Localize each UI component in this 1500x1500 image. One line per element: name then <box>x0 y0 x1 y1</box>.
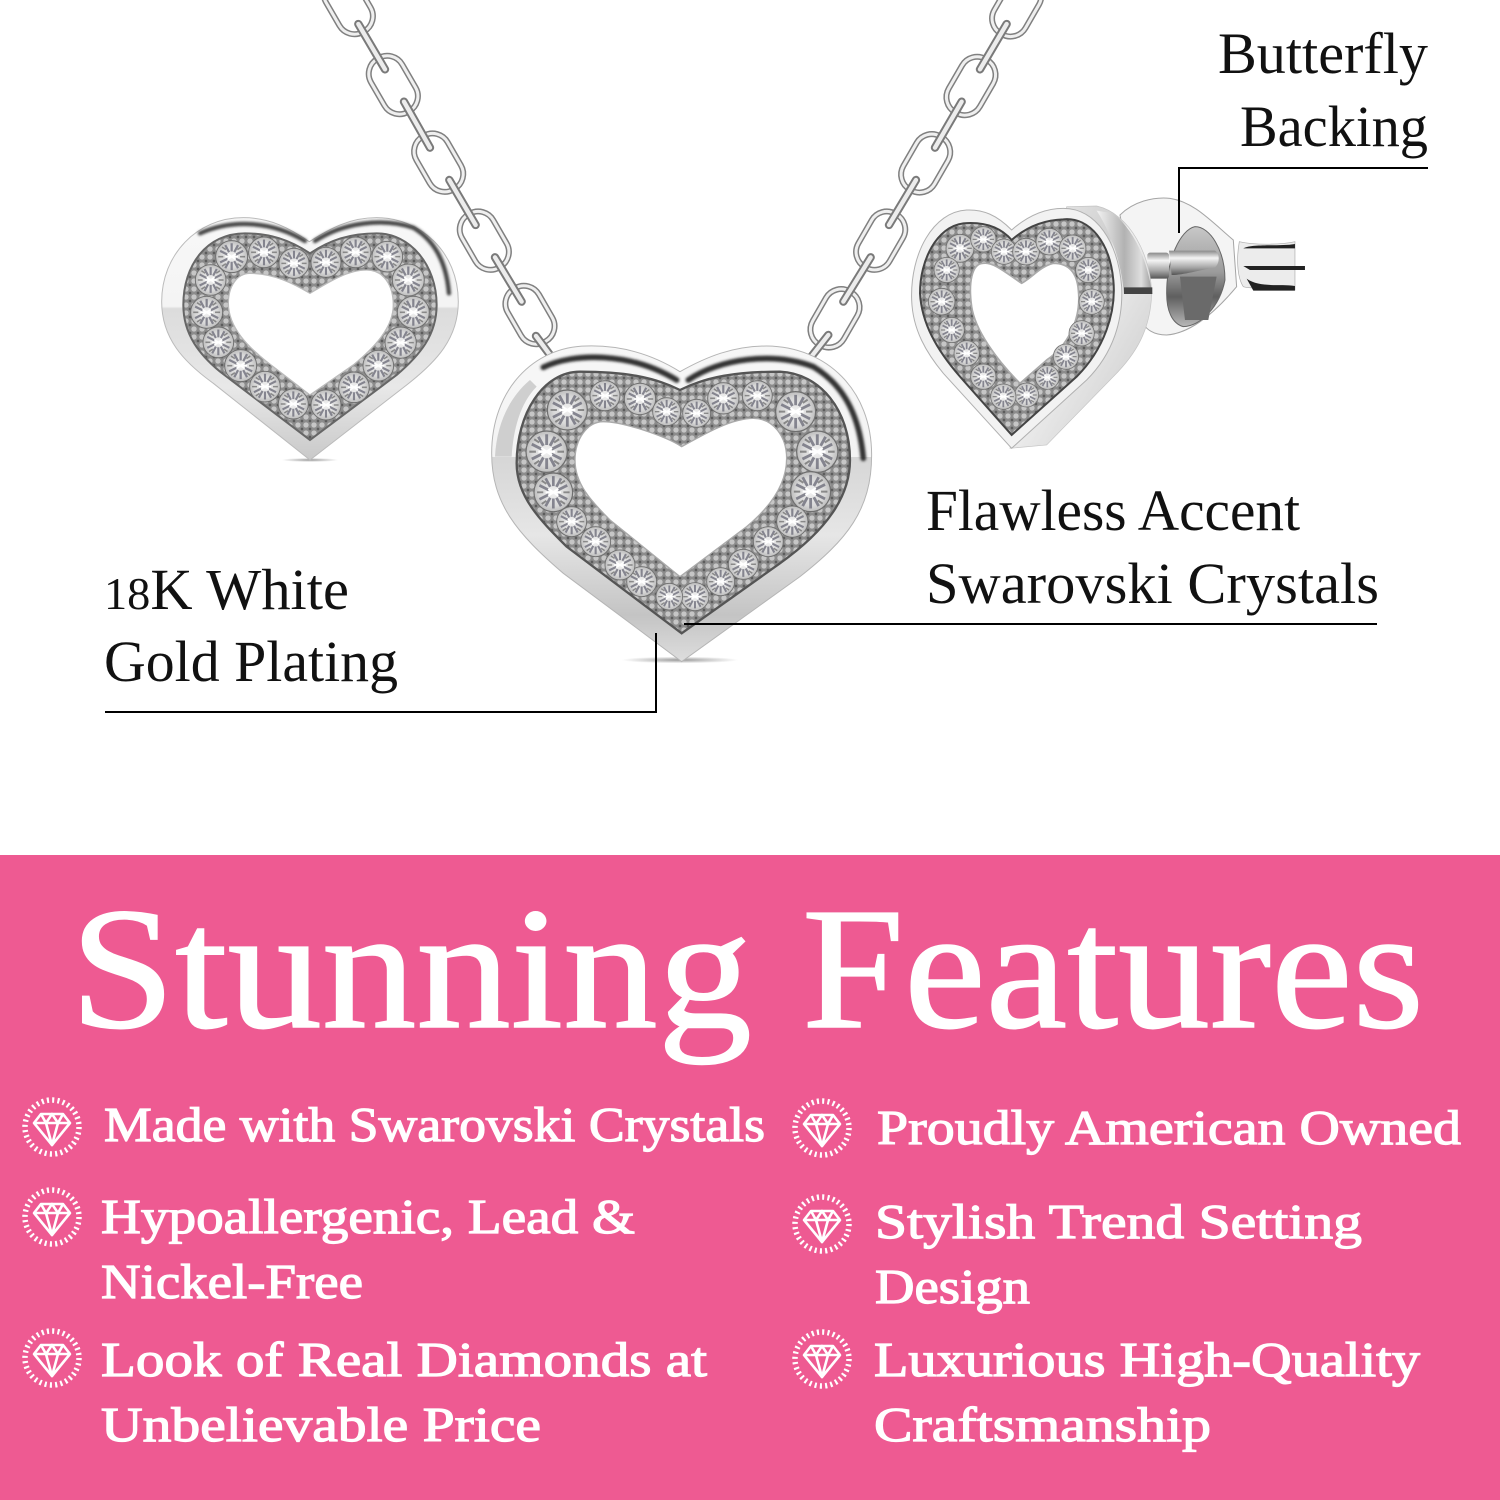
heading: Stunning Features <box>70 872 1424 1065</box>
feature: Hypoallergenic, Lead & Nickel-Free <box>25 1189 635 1309</box>
feature: Proudly American Owned: Proudly American Owned <box>877 1100 1461 1155</box>
feature: Luxurious High-Quality Craftsmanship <box>795 1332 1421 1452</box>
left heart earring <box>162 218 458 462</box>
heart pendant <box>492 346 872 663</box>
feature: Hypoallergenic, Lead & Nickel-Free: Nickel-Free <box>101 1254 363 1309</box>
right heart stud earring with butterfly backing <box>912 198 1305 448</box>
callout: Butterfly Backing: Butterfly <box>1218 21 1428 86</box>
callout: 18K White Gold Plating <box>104 557 656 712</box>
callout: Flawless Accent Swarovski Crystals: Swarovski Crystals <box>926 551 1379 616</box>
feature: Look of Real Diamonds at Unbelievable Price <box>25 1331 707 1452</box>
callout: Flawless Accent Swarovski Crystals <box>684 478 1379 624</box>
feature: Stylish Trend Setting Design <box>795 1194 1362 1314</box>
feature: Made with Swarovski Crystals: Made with Swarovski Crystals <box>104 1097 765 1152</box>
callout: 18K White Gold Plating: 18K White <box>104 557 349 622</box>
callout: Butterfly Backing: Backing <box>1240 94 1428 159</box>
feature: Look of Real Diamonds at Unbelievable Price: Look of Real Diamonds at <box>101 1332 707 1387</box>
necklace left chain <box>317 0 561 362</box>
feature: Stylish Trend Setting Design: Stylish Trend Setting <box>875 1194 1362 1249</box>
callout: Butterfly Backing <box>1179 21 1428 233</box>
callout: 18K White Gold Plating: Gold Plating <box>104 629 398 694</box>
feature: Luxurious High-Quality Craftsmanship: Craftsmanship <box>874 1397 1211 1452</box>
heading: Stunning Features: Features <box>802 872 1424 1065</box>
heading: Stunning Features: Stunning <box>70 872 752 1065</box>
feature: Look of Real Diamonds at Unbelievable Price: Unbelievable Price <box>101 1397 541 1452</box>
callout: Flawless Accent Swarovski Crystals: Flawless Accent <box>926 478 1300 543</box>
panel: pink features band <box>0 855 1500 1500</box>
feature: Hypoallergenic, Lead & Nickel-Free: Hypoallergenic, Lead & <box>101 1189 635 1244</box>
panel: white product area <box>0 0 1500 855</box>
feature: Stylish Trend Setting Design: Design <box>875 1259 1030 1314</box>
feature: Luxurious High-Quality Craftsmanship: Luxurious High-Quality <box>874 1332 1421 1387</box>
necklace right chain <box>804 0 1048 358</box>
